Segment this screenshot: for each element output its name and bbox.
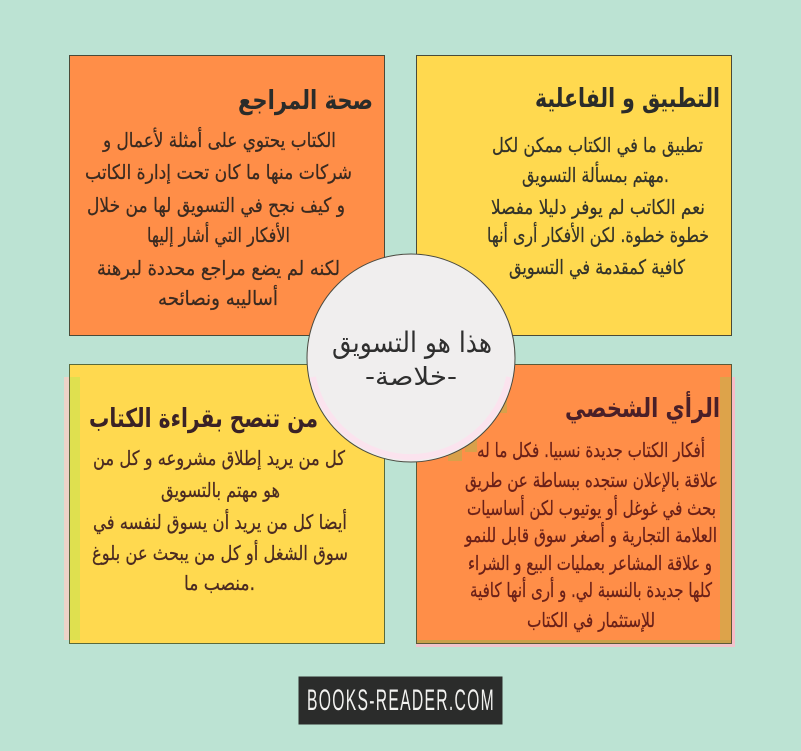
heading: personal opinion: الرأي الشخصي — [565, 391, 720, 424]
text block: who should read the book: أيضا كل من يريد أن يسوق لنفسه في — [93, 509, 347, 535]
text block: who should read the book: هو مهتم بالتسويق — [161, 478, 280, 502]
panel: source credibility — [70, 56, 384, 336]
circle title: هذا هو التسويق — [332, 326, 492, 359]
text block: application and effectiveness: تطبيق ما في الكتاب ممكن لكل — [492, 133, 703, 158]
text block: who should read the book: كل من يريد إطلاق مشروعه و كل من — [93, 446, 345, 471]
text block: application and effectiveness: مهتم بمسألة التسويق. — [522, 161, 669, 187]
text block: personal opinion: للإستثمار في الكتاب — [527, 608, 655, 633]
logo: books-reader.com — [298, 676, 502, 724]
text block: who should read the book — [92, 446, 348, 595]
panel: personal opinion — [416, 364, 732, 644]
text block: application and effectiveness: خطوة خطوة. لكن الأفكار أرى أنها — [487, 222, 709, 247]
panel: who should read the book — [70, 364, 384, 644]
text block: application and effectiveness: كافية كمقدمة في التسويق — [509, 255, 685, 280]
text block: personal opinion: أفكار الكتاب جديدة نسبيا. فكل ما له — [477, 437, 705, 462]
text block: personal opinion: و علاقة المشاعر بعمليات البيع و الشراء — [468, 551, 712, 575]
text block: personal opinion: بحث في غوغل أو يوتيوب لكن أساسيات — [467, 495, 716, 521]
heading: who should read the book: من تنصح بقراءة الكتاب — [89, 404, 318, 434]
text block: personal opinion — [464, 437, 718, 633]
text block: application and effectiveness: نعم الكاتب لم يوفر دليلا مفصلا — [491, 195, 705, 219]
text block: source credibility: شركات منها ما كان تحت إدارة الكاتب — [85, 160, 352, 185]
heading: source credibility: صحة المراجع — [238, 86, 373, 116]
text block: source credibility: لكنه لم يضع مراجع محددة لبرهنة — [97, 256, 340, 280]
panel: application and effectiveness — [416, 56, 732, 336]
text block: source credibility: أساليبه ونصائحه — [158, 285, 278, 310]
text block: source credibility: الكتاب يحتوي على أمثلة لأعمال و — [102, 127, 336, 153]
text block: application and effectiveness — [487, 133, 709, 280]
text block: source credibility: الأفكار التي أشار إليها — [147, 222, 290, 248]
text block: personal opinion: كلها جديدة بالنسبة لي. و أرى أنها كافية — [470, 577, 712, 603]
text block: personal opinion: العلامة التجارية و أصغر سوق قابل للنمو — [464, 522, 717, 547]
text block: who should read the book: منصب ما. — [184, 571, 255, 595]
text block: source credibility — [85, 127, 352, 310]
text block: who should read the book: سوق الشغل أو كل من يبحث عن بلوغ — [92, 540, 348, 565]
text block: source credibility: و كيف نجح في التسويق لها من خلال — [87, 193, 345, 218]
central circle: book summary title — [307, 254, 515, 462]
circle subtitle: -خلاصة- — [365, 362, 457, 391]
heading: application and effectiveness: التطبيق و الفاعلية — [535, 84, 720, 114]
logo: books-reader.com: BOOKS-READER.COM — [307, 684, 495, 717]
text block: personal opinion: علاقة بالإعلان ستجده ببساطة عن طريق — [465, 468, 718, 492]
